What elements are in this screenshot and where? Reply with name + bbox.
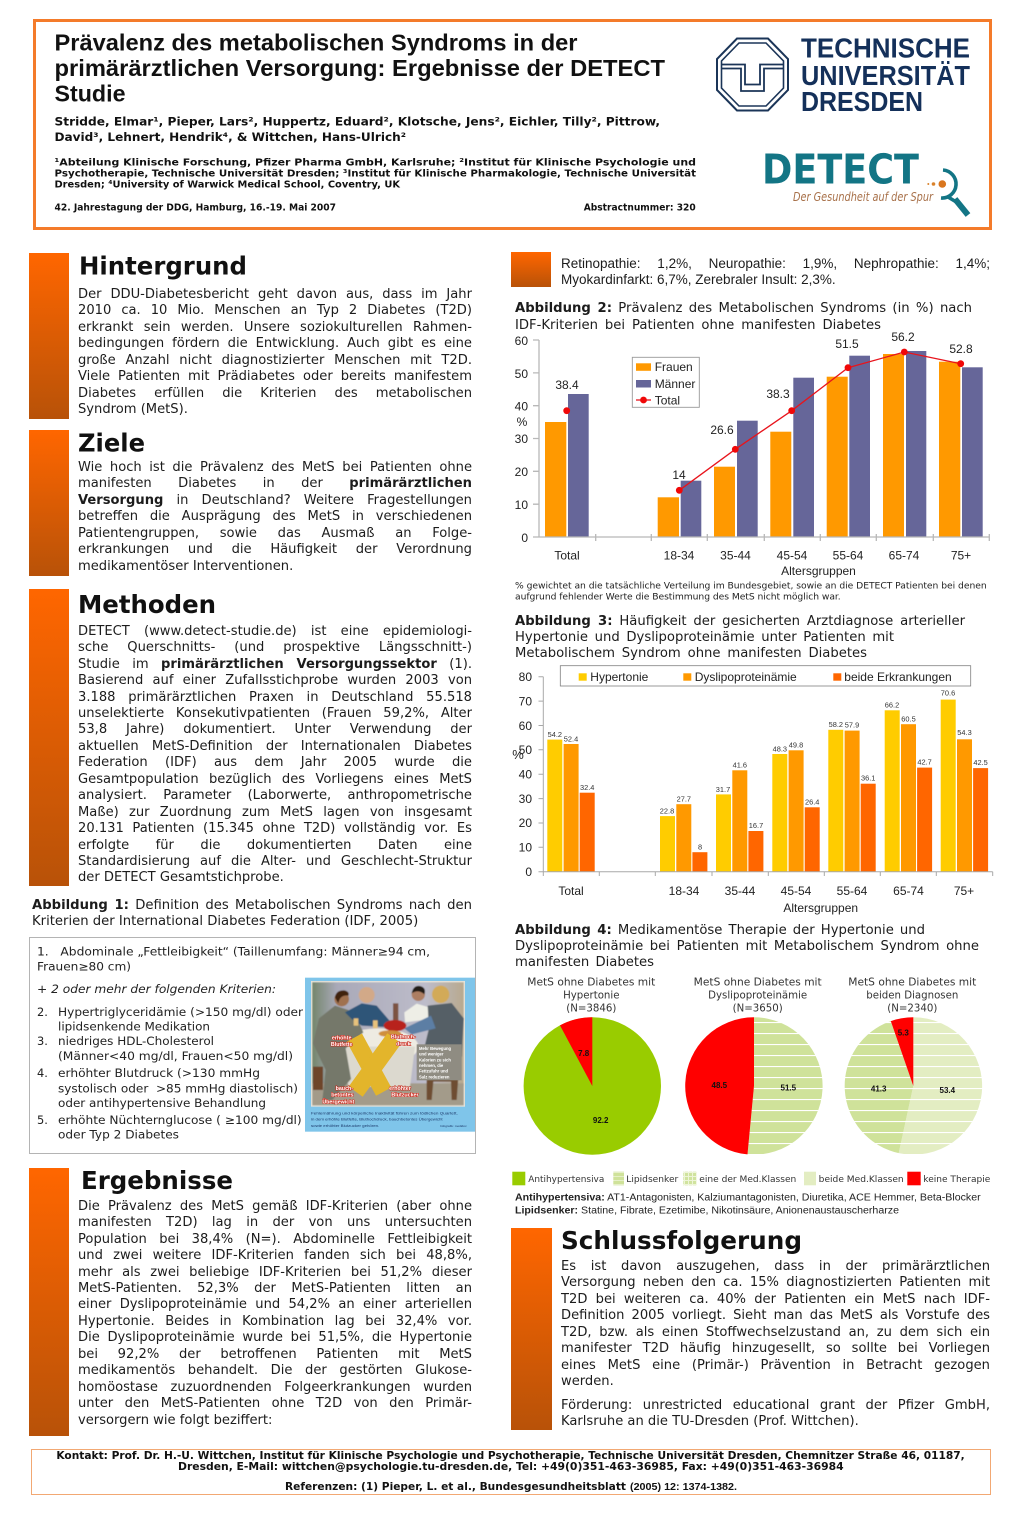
header texts xyxy=(54,30,970,217)
bar chart: Abbildung 3: Altersgruppen xyxy=(783,901,858,915)
criteria list: oder Typ 2 Diabetes xyxy=(58,1128,179,1142)
bar chart: Abbildung 3: 57.9 xyxy=(845,720,859,730)
panel: Retinopathie continuation xyxy=(511,252,990,287)
body text: T2D, bzw. als einen Stoffwechselzustand an, zu dem sich ein xyxy=(561,1325,990,1340)
poster title: Studie xyxy=(54,81,126,107)
illustration labels: erhöhte xyxy=(332,1035,351,1041)
bar chart: Abbildung 2: 40 xyxy=(515,400,528,414)
body text xyxy=(560,1259,990,1389)
body text: Standardisierung auf die Alter- und Geschlecht-Struktur xyxy=(78,854,472,869)
body text: Der DDU-Diabetesbericht geht davon aus, dass im Jahr xyxy=(78,287,472,302)
body text: manifesten T2D) lag in der von uns untersuchten xyxy=(78,1215,472,1230)
bar chart: Abbildung 3: Total xyxy=(558,884,584,898)
bar chart: Abbildung 3: 80 xyxy=(519,670,532,684)
bar chart: Abbildung 2: 20 xyxy=(515,465,528,479)
pie 3: beide Diagnosen: 41.3 xyxy=(871,1084,887,1094)
body text xyxy=(78,287,472,417)
caption: Abbildung 2 xyxy=(515,301,972,333)
bar chart: Abbildung 3: % xyxy=(512,747,524,762)
pie 3: beide Diagnosen xyxy=(845,978,982,1155)
affiliations xyxy=(54,158,696,190)
panel: IDF criteria box xyxy=(29,937,476,1154)
bar chart: Abbildung 2: 26.6 xyxy=(710,423,734,437)
criteria list: 4. xyxy=(37,1066,48,1080)
bar chart: Abbildung 3: 30 xyxy=(519,792,532,806)
funding note: Förderung: unrestricted educational grant der Pfizer GmbH, xyxy=(561,1398,990,1413)
footer text: Referenzen: (1) Pieper, L. et al., Bundesgesundheitsblatt xyxy=(285,1481,626,1493)
bar chart: Abbildung 3: 40 xyxy=(519,768,532,782)
bar chart: Abbildung 3: 35-44 xyxy=(725,884,756,898)
panel: header xyxy=(33,19,992,230)
body text: einer Dyslipoproteinämie und 54,2% an einer arteriellen xyxy=(78,1297,472,1312)
pie 2: Dyslipoproteinämie: Dyslipoproteinämie xyxy=(708,991,807,1002)
yellow X xyxy=(354,1038,394,1092)
bar chart: Abbildung 2: 45-54 xyxy=(777,548,808,562)
affiliations: Psychotherapie, Technische Universität Dresden; ³Institut für Klinische Pharmakologie, Technische Universität xyxy=(54,168,696,180)
body text: medikamentös behandelt. Die der gestörten Glukose- xyxy=(78,1363,472,1378)
bar chart: Abbildung 2: 56.2 xyxy=(891,330,915,344)
bar chart: Abbildung 3: 66.2 xyxy=(885,700,899,710)
heading: Ergebnisse xyxy=(81,1166,233,1195)
conference line: 42. Jahrestagung der DDG, Hamburg, 16.-19. Mai 2007 xyxy=(54,202,336,214)
criteria list: 5. xyxy=(37,1113,48,1127)
footnote: Abbildung 2: aufgrund fehlender Werte die Bestimmung des MetS nicht möglich war. xyxy=(515,592,841,602)
bar chart: Abbildung 3: 41.6 xyxy=(733,760,747,770)
criteria list: 3. xyxy=(37,1034,48,1048)
caption: Abbildung 3 xyxy=(515,614,966,661)
pie 2: Dyslipoproteinämie: 48.5 xyxy=(712,1081,728,1090)
funding note xyxy=(561,1398,990,1429)
illustration: metabolic quartet at table xyxy=(305,978,475,1132)
pie 2: Dyslipoproteinämie: MetS ohne Diabetes mit xyxy=(694,978,822,988)
body text: Wie hoch ist die Prävalenz des MetS bei Patienten ohne xyxy=(78,460,472,475)
body text: unter den MetS-Patienten ohne T2D von den Primär- xyxy=(78,1396,472,1411)
accent bar xyxy=(511,1228,552,1430)
body text: Versorgung neben den ca. 15% diagnostizierten Patienten mit xyxy=(561,1275,990,1290)
illustration caption: in dem erhöhte Blutfette, Bluthochdruck, bauchbetontes Übergewicht xyxy=(311,1118,443,1122)
pie 2: Dyslipoproteinämie: (N=3650) xyxy=(733,1004,783,1015)
footer text: (2005) 12: 1374-1382. xyxy=(630,1482,737,1493)
pie legend: Lipidsenker xyxy=(626,1175,679,1185)
body text: Federation (IDF) aus dem Jahr 2005 wurde die xyxy=(78,755,472,770)
bar chart: Abbildung 3: 55-64 xyxy=(837,884,868,898)
bar chart: Abbildung 3: 70.6 xyxy=(941,688,955,698)
bar chart: Abbildung 2: Altersgruppen xyxy=(781,564,856,578)
bar chart: Abbildung 3: 27.7 xyxy=(677,794,691,804)
body text: T2D bei weiteren ca. 40% der Patienten ein MetS nach IDF- xyxy=(561,1292,990,1307)
panel: Methoden xyxy=(29,589,472,886)
body text: sche Querschnitts- (und prospektive Längsschnitt-) xyxy=(78,640,472,655)
pie 3: beide Diagnosen: MetS ohne Diabetes mit xyxy=(848,978,976,988)
legend: Total xyxy=(655,394,680,408)
bar chart: Abbildung 3: 42.7 xyxy=(917,758,932,766)
bar chart: Abbildung 3: 26.4 xyxy=(805,798,819,806)
poster title: Prävalenz des metabolischen Syndroms in der xyxy=(54,30,578,56)
caption: Abbildung 1: Kriterien der International Diabetes Federation (IDF, 2005) xyxy=(32,914,418,929)
illustration labels: Blutfette xyxy=(331,1042,353,1048)
criteria list: 2. xyxy=(37,1005,48,1019)
body text: betreffen die Ausprägung des MetS in verschiedenen xyxy=(78,509,472,524)
legend xyxy=(632,357,699,408)
heading: Schlussfolgerung xyxy=(561,1226,802,1255)
criteria list xyxy=(37,944,430,1142)
legend: Hypertonie xyxy=(590,670,649,684)
body text: Studie im primärärztlichen Versorgungssektor (1). xyxy=(78,657,472,672)
text xyxy=(561,256,990,287)
heading: Methoden xyxy=(78,590,216,619)
body text: erfolgte für die dokumentierten Daten eine xyxy=(78,838,472,853)
bar chart: Abbildung 3: 70 xyxy=(519,694,532,708)
bar chart: Abbildung 3: 54.3 xyxy=(957,728,972,737)
illustration labels: erhöhter xyxy=(389,1086,411,1092)
criteria list: erhöhte Nüchternglucose ( ≥100 mg/dl) xyxy=(58,1113,302,1127)
body text: der DETECT Gesamtstichprobe. xyxy=(78,870,284,885)
pie legend: eine der Med.Klassen xyxy=(699,1175,796,1185)
caption: Abbildung 3: Abbildung 3: Häufigkeit der gesicherten Arztdiagnose arterieller xyxy=(515,614,965,629)
pie 1: Hypertonie: (N=3846) xyxy=(566,1004,616,1015)
panel: Schlussfolgerung xyxy=(511,1226,990,1430)
illustration caption: sowie erhöhter Blutzucker gehören. xyxy=(311,1124,379,1128)
criteria list: lipidsenkende Medikation xyxy=(58,1020,210,1034)
caption: Abbildung 1: Abbildung 1: Definition des Metabolischen Syndroms nach den xyxy=(32,898,472,913)
illustration caption: Fehlernährung und körperliche Inaktivität führen zum tödlichen Quartett, xyxy=(311,1111,458,1115)
body text: versorgern wie folgt beziffert: xyxy=(78,1413,272,1428)
bar chart: Abbildung 2: 30 xyxy=(515,432,528,446)
body text xyxy=(78,624,472,885)
illustration labels: druck xyxy=(396,1042,411,1048)
criteria list: niedriges HDL-Cholesterol xyxy=(58,1034,214,1048)
body text: eines MetS eine (Primär-) Prävention in Betracht gezogen xyxy=(561,1358,990,1373)
illustration labels xyxy=(322,1034,419,1106)
accent bar xyxy=(511,252,551,287)
body text: MetS-Patienten. 52,3% der MetS-Patienten litten an xyxy=(78,1281,472,1296)
body text xyxy=(78,1199,472,1428)
bar chart: Abbildung 2: 52.8 xyxy=(949,342,973,356)
funding note: Karlsruhe an die TU-Dresden (Prof. Wittchen). xyxy=(561,1414,859,1429)
pie 3: beide Diagnosen: 53.4 xyxy=(940,1086,956,1095)
logo: TU Dresden: DRESDEN xyxy=(801,86,923,117)
criteria list: 1. Abdominale „Fettleibigkeit“ (Taillenumfang: Männer≥94 cm, xyxy=(37,944,430,958)
body text: DETECT (www.detect-studie.de) ist eine epidemiologi- xyxy=(78,624,472,639)
bar chart: Abbildung 2: 10 xyxy=(515,498,528,512)
criteria list: Frauen≥80 cm) xyxy=(37,960,131,974)
bar chart: Abbildung 3: 10 xyxy=(519,840,532,854)
heading: Ziele xyxy=(78,428,145,458)
body text: bedingungen fördern die Entwicklung. Auch gibt es eine xyxy=(78,336,472,351)
pie legend: keine Therapie xyxy=(923,1175,990,1185)
bar chart: Abbildung 3: 8 xyxy=(698,842,702,852)
body text: Basierend auf einer Zufallsstichprobe wurden 2003 von xyxy=(78,673,472,688)
body text: Definition 2005 vorliegt. Sieht man das MetS als Vorstufe des xyxy=(561,1308,990,1323)
body text: werden. xyxy=(561,1374,614,1389)
body text: Population bei 38,4% (N=). Abdominelle Fettleibigkeit xyxy=(78,1232,472,1247)
bar chart: Abbildung 3: 50 xyxy=(519,743,532,757)
bar chart: Abbildung 2: 50 xyxy=(515,367,528,381)
illustration note: Salz reduzieren xyxy=(419,1074,450,1079)
pie legend: Antihypertensiva xyxy=(528,1175,604,1185)
illustration note xyxy=(417,1044,462,1080)
footer text: Dresden, E-Mail: wittchen@psychologie.tu-dresden.de, Tel: +49(0)351-463-36985, Fax: +49(0)351-463-36984 xyxy=(178,1461,844,1473)
criteria list: (Männer<40 mg/dl, Frauen<50 mg/dl) xyxy=(58,1049,293,1063)
bar chart: Abbildung 3: 60 xyxy=(519,719,532,733)
body text: erkrankungen und die Häufigkeit der Verordnung xyxy=(78,542,472,557)
pie 1: Hypertonie: Hypertonie xyxy=(563,991,620,1002)
pie 1: Hypertonie: MetS ohne Diabetes mit xyxy=(527,978,655,988)
illustration note: Kalorien zu sich xyxy=(419,1057,451,1062)
bar chart: Abbildung 2: 18-34 xyxy=(664,548,695,562)
bar chart: Abbildung 3: 54.2 xyxy=(548,730,562,739)
affiliations: Dresden; ⁴University of Warwick Medical School, Coventry, UK xyxy=(54,180,401,190)
bar chart: Abbildung 2: Total xyxy=(554,548,580,562)
pie 2: Dyslipoproteinämie: 51.5 xyxy=(781,1084,797,1092)
legend: beide Erkrankungen xyxy=(844,670,952,684)
body text: 3.188 primärärztlichen Praxen in Deutschland 55.518 xyxy=(78,690,472,704)
footer text: Kontakt: Prof. Dr. H.-U. Wittchen, Institut für Klinische Psychologie und Psychotherapie, Technische Universität Dresden, Chemnitzer Straße 46, 01187, xyxy=(56,1450,965,1462)
illustration note: nehmen, die xyxy=(419,1063,444,1068)
illustration note: und weniger xyxy=(419,1052,444,1057)
caption: Abbildung 3: Hypertonie und Dyslipoproteinämie unter Patienten mit xyxy=(515,630,894,645)
legend xyxy=(560,666,971,686)
pie 3: beide Diagnosen: beiden Diagnosen xyxy=(866,991,958,1002)
panel: Hintergrund xyxy=(29,251,472,419)
bar chart: Abbildung 2: % xyxy=(517,415,528,429)
caption: Abbildung 4: Dyslipoproteinämie bei Patienten mit Metabolischem Syndrom ohne xyxy=(515,939,979,954)
illustration labels: bauch- xyxy=(336,1086,353,1092)
logo: TU Dresden: UNIVERSITÄT xyxy=(801,60,970,91)
bar chart: Abbildung 3: 16.7 xyxy=(749,821,763,830)
body text: Die Dyslipoproteinämie wurde bei 51,5%, die Hypertonie xyxy=(78,1330,472,1345)
logo: DETECT: Der Gesundheit auf der Spur xyxy=(793,190,934,204)
bar chart: Abbildung 3: 0 xyxy=(525,865,532,879)
logo: DETECT xyxy=(762,146,968,215)
bar chart: Abbildung 3: 60.5 xyxy=(901,714,916,724)
bar chart: Abbildung 3: 31.7 xyxy=(716,785,730,794)
poster title: primärärztlichen Versorgung: Ergebnisse der DETECT xyxy=(54,55,665,81)
pie 1: Hypertonie: 7.8 xyxy=(578,1049,590,1058)
caption: Abbildung 2: Abbildung 2: Prävalenz des Metabolischen Syndroms (in %) nach xyxy=(515,301,972,316)
body text: aktuellen MetS-Definition der Internationalen Diabetes xyxy=(78,739,472,754)
illustration labels: Blutzucker xyxy=(391,1093,419,1099)
bar chart: Abbildung 3: 22.8 xyxy=(660,806,674,816)
caption: Abbildung 4: Abbildung 4: Medikamentöse Therapie der Hypertonie und xyxy=(515,922,925,938)
panel: Ergebnisse xyxy=(29,1166,472,1436)
body text: Diabetes erfüllen die Kriterien des metabolischen xyxy=(78,386,472,401)
bar chart: Abbildung 3: 49.8 xyxy=(789,740,803,750)
bar chart: Abbildung 3: 75+ xyxy=(954,884,974,898)
body text: analysiert. Parameter (Laborwerte, anthropometrische xyxy=(78,788,472,803)
bar chart: Abbildung 2: 38.4 xyxy=(555,378,579,392)
accent bar xyxy=(29,1168,69,1436)
bar chart: Abbildung 2: 38.3 xyxy=(766,387,790,401)
body text: Maße) zur Zuordnung zum MetS lagen von insgesamt xyxy=(78,805,472,820)
poster title xyxy=(54,30,665,107)
accent bar xyxy=(29,253,69,419)
body text: Versorgung in Deutschland? Weitere Fragestellungen xyxy=(78,493,472,508)
body text xyxy=(78,460,472,574)
illustration note: Fettzufuhr und xyxy=(419,1069,449,1074)
bar chart: Abbildung 2: 14 xyxy=(672,468,686,482)
body text: manifesten Diabetes in der primärärztlichen xyxy=(78,476,472,491)
caption: Abbildung 2: IDF-Kriterien bei Patienten ohne manifesten Diabetes xyxy=(515,318,881,333)
text: Retinopathie: 1,2%, Neuropathie: 1,9%, Nephropathie: 1,4%; xyxy=(561,256,990,271)
body text: erkrankt sein werden. Unsere soziokulturellen Rahmen- xyxy=(78,320,472,335)
accent bar xyxy=(29,589,69,886)
bar chart: Abbildung 2: 75+ xyxy=(951,548,971,562)
affiliations: ¹Abteilung Klinische Forschung, Pfizer Pharma GmbH, Karlsruhe; ²Institut für Klinische Psychologie und xyxy=(54,158,696,168)
medication class notes: Antihypertensiva: AT1-Antagonisten, Kalziumantagonisten, Diuretika, ACE Hemmer, Beta-Blocker xyxy=(515,1193,981,1204)
bar chart: Abbildung 3: 42.5 xyxy=(973,758,988,767)
caption: Abbildung 4 xyxy=(515,922,979,970)
body text: Es ist davon auszugehen, dass in der primärärztlichen xyxy=(561,1259,990,1274)
body text: und zwei weitere IDF-Kriterien fanden sich bei 48,8%, xyxy=(78,1248,472,1263)
pie 3: beide Diagnosen: (N=2340) xyxy=(887,1004,937,1015)
illustration labels: betontes xyxy=(331,1092,353,1098)
footnote: Abbildung 2: % gewichtet an die tatsächliche Verteilung im Bundesgebiet, sowie an die DETECT Patienten bei denen xyxy=(515,581,987,592)
heading: Hintergrund xyxy=(79,251,247,280)
pie 2: Dyslipoproteinämie xyxy=(685,978,823,1155)
authors: Stridde, Elmar¹, Pieper, Lars², Huppertz, Eduard², Klotsche, Jens², Eichler, Tilly², Pittrow, xyxy=(54,114,660,128)
pie 3: beide Diagnosen: 5.3 xyxy=(898,1028,909,1038)
body text: medikamentöser Interventionen. xyxy=(78,559,293,574)
legend: Dyslipoproteinämie xyxy=(695,670,797,684)
pie 1: Hypertonie: 92.2 xyxy=(593,1116,609,1125)
body text: homöostase zuzuordnenden Folgeerkrankungen wurden xyxy=(78,1380,472,1395)
text: Myokardinfarkt: 6,7%, Zerebraler Insult: 2,3%. xyxy=(561,272,836,287)
accent bar xyxy=(29,430,69,576)
bar chart: Abbildung 2: 51.5 xyxy=(835,337,859,351)
body text: 2010 ca. 10 Mio. Menschen an Typ 2 Diabetes (T2D) xyxy=(78,303,472,318)
bar chart: Abbildung 3: 36.1 xyxy=(861,774,875,782)
body text: Gesamtpopulation bezüglich des Vorliegens eines MetS xyxy=(78,772,472,787)
illustration caption: Infografik: medidoc xyxy=(440,1124,467,1128)
bar chart: Abbildung 2: 65-74 xyxy=(889,548,920,562)
bar chart: Abbildung 2: 35-44 xyxy=(720,548,751,562)
body text: Viele Patienten mit Prädiabetes oder bereits manifestem xyxy=(78,369,472,384)
body text: unselektierte Konsekutivpatienten (Frauen 59,2%, Alter xyxy=(78,706,472,721)
authors xyxy=(54,114,660,144)
legend: Männer xyxy=(655,377,695,391)
body text: manifester T2D häufig hinzugesellt, so sollte bei Vorliegen xyxy=(561,1341,990,1356)
bar chart: Abbildung 3: 48.3 xyxy=(773,744,787,754)
body text: bei 92,2% der betroffenen Patienten mit MetS xyxy=(78,1347,472,1362)
illustration labels: Bluthoch- xyxy=(391,1034,416,1040)
caption: Abbildung 3: Metabolischem Syndrom ohne manifesten Diabetes xyxy=(515,646,867,661)
criteria list: erhöhter Blutdruck (>130 mmHg xyxy=(58,1066,260,1080)
panel: footer contact xyxy=(31,1449,991,1495)
pie 1: Hypertonie xyxy=(524,978,661,1155)
conference line: Abstractnummer: 320 xyxy=(584,202,696,214)
bar chart: Abbildung 3: 20 xyxy=(519,816,532,830)
bar chart: Abbildung 2: 55-64 xyxy=(833,548,864,562)
authors: David³, Lehnert, Hendrik⁴, & Wittchen, Hans-Ulrich² xyxy=(54,130,406,144)
body text: mehr als zwei beliebige IDF-Kriterien bei 51,2% dieser xyxy=(78,1264,472,1280)
logo: TU Dresden: TECHNISCHE xyxy=(801,33,970,64)
body text: 20.131 Patienten (15.345 ohne T2D) vollständig vor. Es xyxy=(78,821,472,836)
bar chart: Abbildung 2: 60 xyxy=(515,334,528,348)
conference line xyxy=(54,202,696,214)
bar chart: Abbildung 2: 0 xyxy=(521,531,528,545)
bar chart: Abbildung 3: 32.4 xyxy=(580,783,594,792)
caption: Abbildung 4: manifesten Diabetes xyxy=(515,955,654,970)
bar chart: Abbildung 3: 45-54 xyxy=(781,884,812,898)
bar chart: Abbildung 3: 65-74 xyxy=(893,884,924,898)
medication class notes: Lipidsenker: Statine, Fibrate, Ezetimibe, Nikotinsäure, Anionenaustauscherharze xyxy=(515,1206,899,1216)
illustration caption xyxy=(311,1111,467,1128)
criteria list: oder antihypertensive Behandlung xyxy=(58,1096,266,1110)
illustration note: Mehr Bewegung xyxy=(419,1046,452,1051)
bar chart: Abbildung 3: 52.4 xyxy=(564,734,578,744)
pie legend: beide Med.Klassen xyxy=(819,1175,904,1185)
pie legend xyxy=(512,1172,990,1185)
criteria list: systolisch oder >85 mmHg diastolisch) xyxy=(58,1081,298,1095)
legend: Frauen xyxy=(655,360,693,374)
logo: DETECT: DETECT xyxy=(762,146,919,194)
body text: Die Prävalenz des MetS gemäß IDF-Kriterien (aber ohne xyxy=(78,1199,472,1214)
bar chart: Abbildung 3: 18-34 xyxy=(669,884,700,898)
logo: TU Dresden xyxy=(717,33,970,117)
body text: Patientengruppen, sowie das Ausmaß an Folge- xyxy=(78,526,472,541)
body text: Hypertonie. Beides in Kombination lag bei 32,4% vor. xyxy=(78,1314,472,1329)
panel: Ziele xyxy=(29,428,472,576)
criteria list: Hypertriglyceridämie (>150 mg/dl) oder xyxy=(58,1005,303,1019)
body text: große Anzahl nicht diagnostizierter Menschen mit T2D. xyxy=(78,353,472,368)
body text: Syndrom (MetS). xyxy=(78,402,188,417)
illustration labels: Übergewicht xyxy=(322,1099,355,1106)
criteria list: + 2 oder mehr der folgenden Kriterien: xyxy=(37,982,276,996)
body text: 53,8 Jahre) dokumentiert. Unter Verwendung der xyxy=(78,722,472,737)
caption: Abbildung 1 xyxy=(32,898,472,929)
medication class notes xyxy=(515,1193,981,1216)
bar chart: Abbildung 3: 58.2 xyxy=(829,720,843,729)
